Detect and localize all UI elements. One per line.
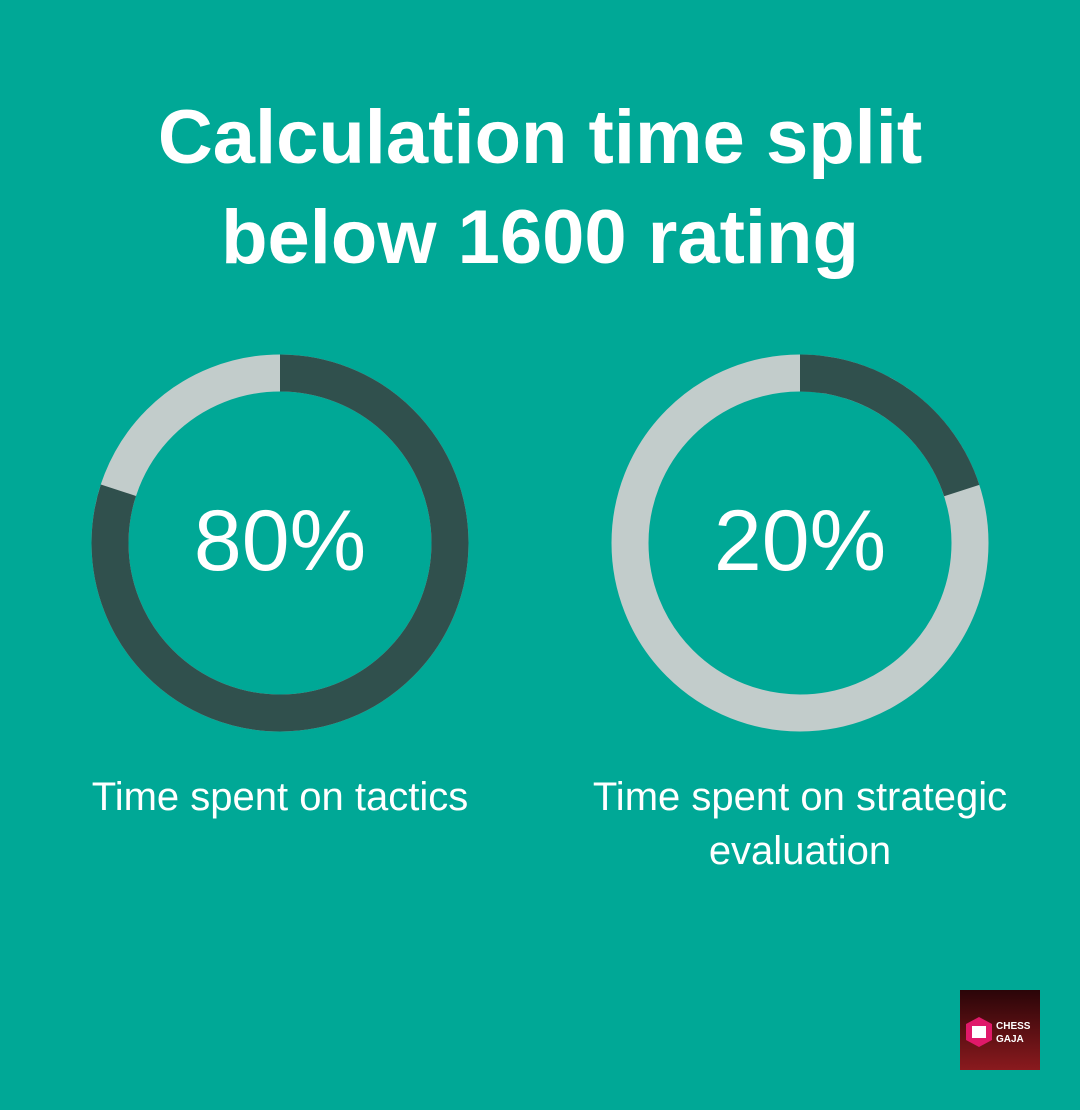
logo: Chess Gaja: GAJA	[996, 1034, 1024, 1045]
donut chart: strategic 20%: 20%	[714, 493, 886, 589]
title: Calculation time split	[158, 95, 922, 180]
logo: Chess Gaja: CHESS	[996, 1021, 1030, 1032]
caption: tactics: Time spent on tactics	[92, 775, 468, 819]
caption: strategic: Time spent on strategic evaluation	[593, 775, 1007, 873]
donut chart: tactics 80%: 80%	[194, 493, 366, 589]
icon: hexagon	[966, 1017, 992, 1047]
logo: Chess Gaja	[960, 990, 1040, 1070]
title: below 1600 rating	[221, 195, 859, 280]
title	[158, 95, 922, 280]
